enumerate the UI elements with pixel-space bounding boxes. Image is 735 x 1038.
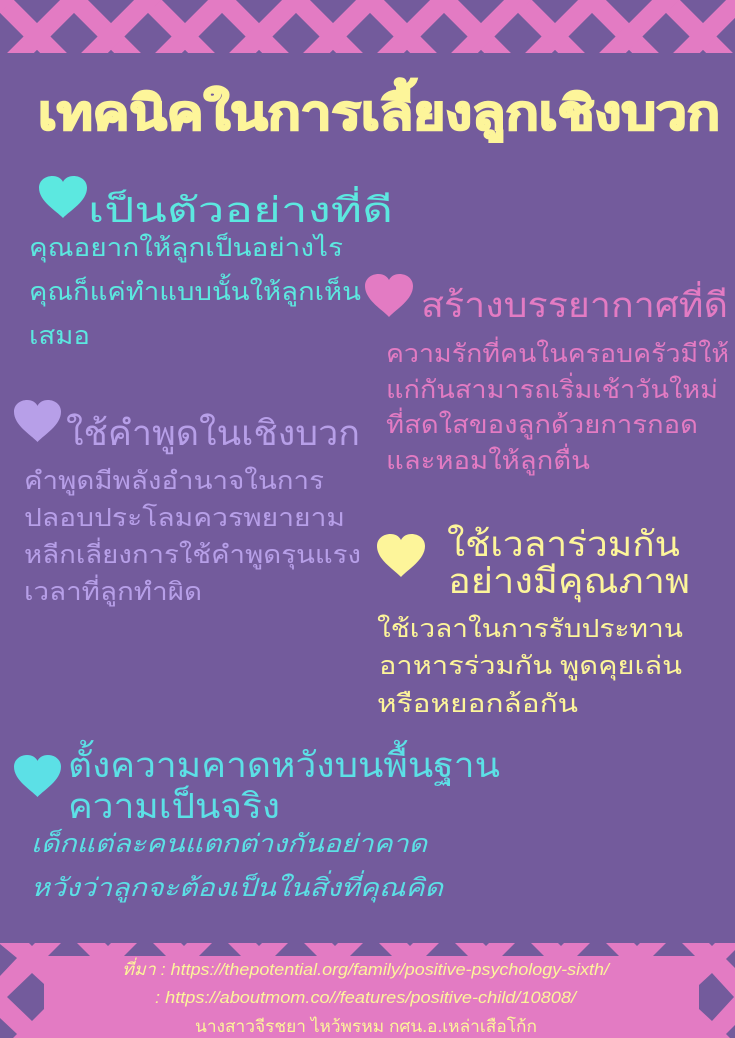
heading: ตั้งความคาดหวังบนพื้นฐาน [68, 739, 500, 786]
body text: และหอมให้ลูกตื่น [386, 443, 590, 476]
heading [447, 524, 690, 602]
section: be a good role model [29, 176, 393, 350]
bottom patterned band [0, 943, 735, 1038]
body text: คุณก็แค่ทำแบบนั้นให้ลูกเห็น [29, 273, 361, 307]
body text: แก่กันสามารถเริ่มเช้าวันใหม่ [386, 372, 718, 404]
body text: ใช้เวลาในการรับประทาน [377, 614, 683, 643]
section: use positive words [14, 400, 361, 607]
body text: หวังว่าลูกจะต้องเป็นในสิ่งที่คุณคิด [31, 870, 445, 903]
icon: lavender heart [14, 400, 61, 442]
heading: สร้างบรรยากาศที่ดี [421, 281, 728, 325]
title: เทคนิคในการเลี้ยงลูกเชิงบวก [38, 78, 720, 143]
heading [68, 739, 500, 826]
body text [377, 614, 683, 718]
icon: cyan heart [14, 755, 61, 797]
section: create a good atmosphere [365, 274, 729, 476]
body text: ที่สดใสของลูกด้วยการกอด [386, 407, 698, 440]
body text: ปลอบประโลมควรพยายาม [24, 503, 345, 532]
body text: หรือหยอกล้อกัน [377, 690, 578, 718]
icon: pink heart [365, 274, 413, 317]
icon: teal heart [39, 176, 87, 218]
body text [31, 828, 445, 903]
footer credits: : https://aboutmom.co//features/positive-child/10808/ [155, 988, 578, 1007]
icon: yellow heart [377, 534, 425, 577]
body text: คุณอยากให้ลูกเป็นอย่างไร [29, 232, 343, 263]
heading: ความเป็นจริง [68, 785, 280, 826]
top lattice border [0, 0, 735, 53]
body text: ความรักที่คนในครอบครัวมีให้ [386, 336, 729, 368]
footer credits [122, 957, 611, 1036]
heading: ใช้คำพูดในเชิงบวก [66, 413, 360, 454]
footer credits: นางสาวจีรชยา ไหว้พรหม กศน.อ.เหล่าเสือโก้ก [195, 1016, 537, 1036]
body text: คำพูดมีพลังอำนาจในการ [24, 466, 324, 496]
footer credits: ที่มา : https://thepotential.org/family/positive-psychology-sixth/ [122, 957, 611, 979]
body text [386, 336, 729, 476]
body text: หลีกเลี่ยงการใช้คำพูดรุนแรง [24, 537, 361, 570]
body text: อาหารร่วมกัน พูดคุยเล่น [379, 652, 682, 681]
section: realistic expectations [14, 739, 500, 903]
section: quality time together [377, 524, 690, 718]
heading: อย่างมีคุณภาพ [448, 562, 690, 602]
body text: เวลาที่ลูกทำผิด [24, 574, 202, 607]
heading: เป็นตัวอย่างที่ดี [88, 186, 393, 230]
body text [29, 232, 361, 350]
heading: ใช้เวลาร่วมกัน [447, 524, 680, 564]
body text [24, 466, 361, 607]
body text: เสมอ [29, 322, 90, 350]
body text: เด็กแต่ละคนแตกต่างกันอย่าคาด [31, 828, 429, 858]
